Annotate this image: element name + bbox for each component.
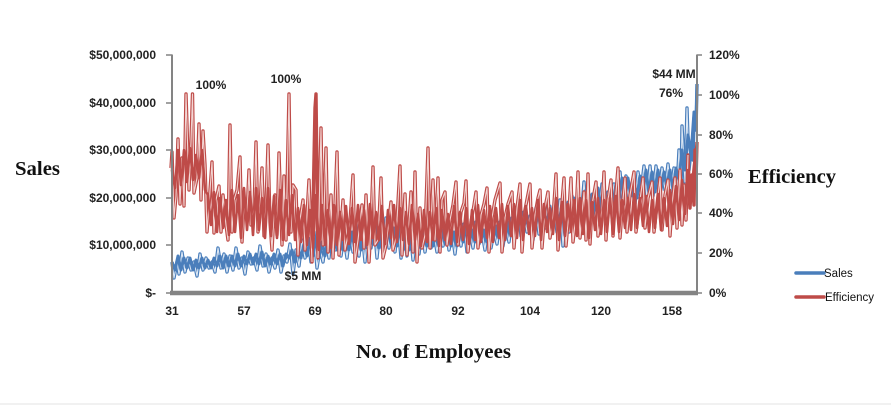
right axis labels: efficiency bbox=[709, 48, 740, 300]
x axis labels: employees: 57 bbox=[237, 304, 251, 318]
left axis labels: sales: $40,000,000 bbox=[89, 96, 156, 110]
right axis labels: efficiency: 80% bbox=[709, 128, 733, 142]
right axis labels: efficiency: 20% bbox=[709, 246, 733, 260]
left axis labels: sales: $- bbox=[145, 286, 156, 300]
left axis labels: sales bbox=[89, 48, 156, 300]
efficiency series line bbox=[171, 94, 697, 262]
left axis labels: sales: $20,000,000 bbox=[89, 191, 156, 205]
x axis labels: employees: 80 bbox=[379, 304, 393, 318]
right axis labels: efficiency: 60% bbox=[709, 167, 733, 181]
axis title: Sales: Sales bbox=[15, 158, 60, 180]
x axis labels: employees: 69 bbox=[308, 304, 322, 318]
left and right axes bbox=[166, 54, 702, 294]
right axis labels: efficiency: 100% bbox=[709, 88, 740, 102]
annotation: $5 MM: $5 MM bbox=[285, 269, 321, 283]
annotation: 100% first peak: 100% bbox=[196, 78, 227, 92]
x axis labels: employees: 158 bbox=[662, 304, 682, 318]
x axis labels: employees bbox=[165, 304, 682, 318]
legend item: Efficiency: Efficiency bbox=[825, 292, 874, 304]
x axis labels: employees: 120 bbox=[591, 304, 611, 318]
annotation: 76%: 76% bbox=[659, 86, 683, 100]
right axis labels: efficiency: 40% bbox=[709, 206, 733, 220]
x axis labels: employees: 104 bbox=[520, 304, 540, 318]
annotation: $44 MM: $44 MM bbox=[652, 67, 696, 81]
legend bbox=[796, 268, 874, 304]
sales series line bbox=[172, 84, 697, 278]
right axis labels: efficiency: 120% bbox=[709, 48, 740, 62]
axis title: Efficiency: Efficiency bbox=[748, 166, 837, 188]
left axis labels: sales: $10,000,000 bbox=[89, 238, 156, 252]
legend item: Sales: Sales bbox=[824, 268, 853, 280]
left axis labels: sales: $50,000,000 bbox=[89, 48, 156, 62]
right axis labels: efficiency: 0% bbox=[709, 286, 727, 300]
annotation: 100% second peak: 100% bbox=[271, 72, 302, 86]
left axis labels: sales: $30,000,000 bbox=[89, 143, 156, 157]
x axis labels: employees: 92 bbox=[451, 304, 465, 318]
axis title: No. of Employees: No. of Employees bbox=[356, 341, 511, 363]
x axis labels: employees: 31 bbox=[165, 304, 179, 318]
